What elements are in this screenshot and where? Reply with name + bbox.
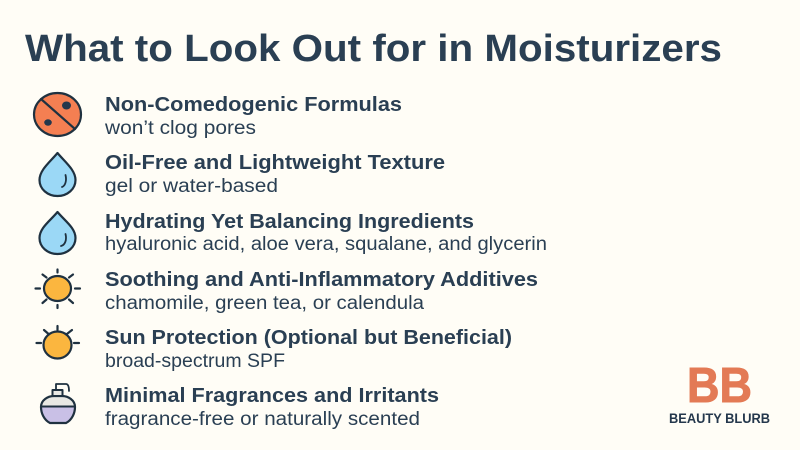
icon: perfume bottle (41, 384, 75, 423)
logo: Beauty Blurb (669, 359, 770, 426)
icon: water drop (40, 212, 76, 254)
logo mark: BB: BB (687, 359, 752, 413)
item: sun protection (36, 326, 512, 372)
text: won't clog pores: won’t clog pores (104, 118, 256, 139)
item: hydrating ingredients (40, 210, 547, 255)
heading: oil-free texture: Oil-Free and Lightweight Texture (105, 151, 445, 174)
item: minimal fragrances (41, 384, 439, 430)
item: soothing additives (36, 268, 538, 314)
heading: soothing additives: Soothing and Anti-Inflammatory Additives (105, 268, 538, 291)
heading: non-comedogenic formulas: Non-Comedogenic Formulas (105, 93, 402, 116)
title: What to Look Out for in Moisturizers (25, 28, 722, 70)
logo wordmark: BEAUTY BLURB (669, 411, 770, 426)
icon: full sun (36, 270, 80, 308)
item: oil-free texture (40, 151, 445, 197)
text: ingredient list: hyaluronic acid, aloe vera, squalane, and glycerin (105, 234, 547, 255)
text: gel or water-based: gel or water-based (105, 176, 278, 197)
heading: minimal fragrances: Minimal Fragrances and Irritants (105, 384, 439, 407)
text: broad-spectrum SPF: broad-spectrum SPF (105, 351, 285, 372)
icon: half sun (36, 326, 79, 358)
text: fragrance-free: fragrance-free or naturally scented (105, 409, 420, 430)
text: chamomile list: chamomile, green tea, or calendula (105, 293, 424, 314)
icon: water drop (40, 153, 76, 196)
item: non-comedogenic formulas (34, 93, 402, 139)
heading: sun protection: Sun Protection (Optional but Beneficial) (105, 326, 512, 349)
heading: hydrating ingredients: Hydrating Yet Balancing Ingredients (105, 210, 474, 233)
icon: crossed-out pores (34, 93, 81, 136)
